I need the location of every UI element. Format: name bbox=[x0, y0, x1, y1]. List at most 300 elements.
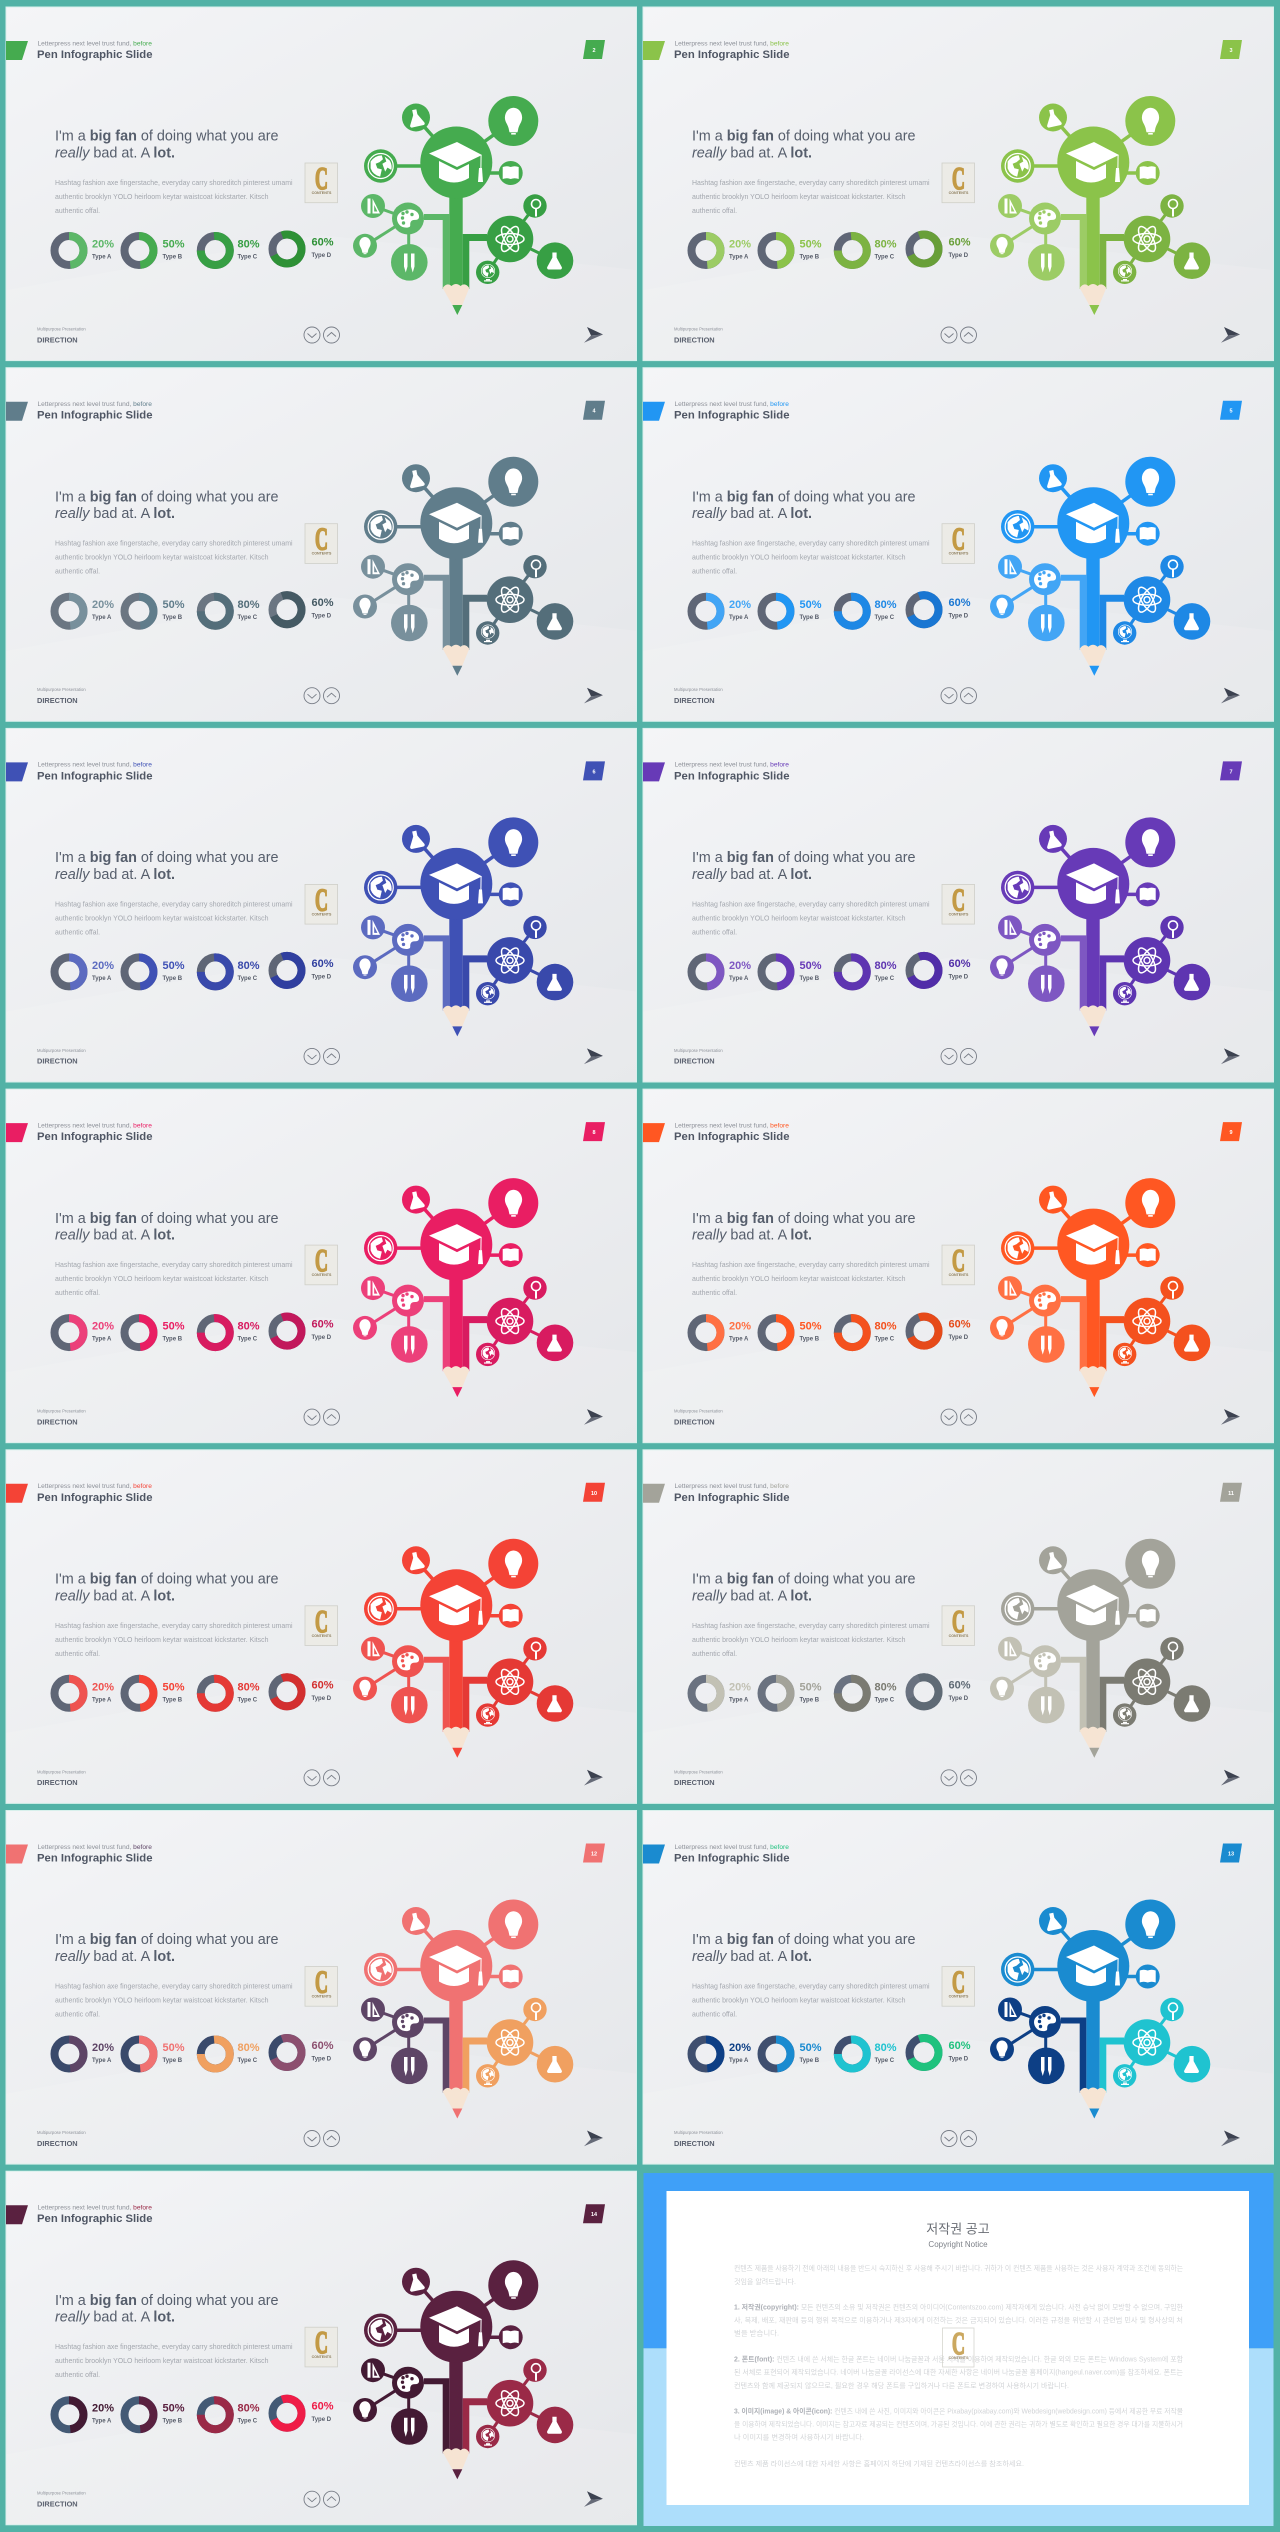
donut A bbox=[692, 2040, 751, 2068]
pen tree diagram bbox=[353, 1178, 573, 1397]
logo: CONTENTS bbox=[949, 1273, 969, 1277]
donut C bbox=[201, 1318, 260, 1347]
slide 7 purple bbox=[643, 728, 1274, 1082]
pencil body bbox=[424, 1633, 487, 1758]
body text: Hashtag fashion axe fingerstache, everyday carry shoreditch pinterest umami bbox=[55, 180, 293, 187]
body text: authentic brooklyn YOLO heirloom keytar waistcoat kickstarter. Kitsch bbox=[55, 555, 269, 562]
donut D bbox=[272, 1677, 334, 1706]
logo: CONTENTS bbox=[312, 1994, 332, 1998]
logo bbox=[942, 521, 974, 563]
top icon cluster bbox=[1001, 96, 1175, 198]
panel: copyright notice bbox=[644, 2173, 1274, 2526]
pen tree diagram bbox=[353, 1900, 573, 2118]
logo: CONTENTS bbox=[949, 552, 969, 556]
page number bbox=[583, 40, 605, 59]
body text bbox=[55, 1262, 293, 1297]
donut C bbox=[201, 2040, 260, 2069]
donut B: 50% bbox=[800, 960, 822, 972]
logo: CONTENTS bbox=[949, 912, 969, 916]
title: Pen Infographic Slide bbox=[37, 1131, 152, 1143]
footer label: DIRECTION bbox=[674, 1057, 715, 1066]
pen tree diagram bbox=[353, 2260, 573, 2479]
headline: really bad at. A lot. bbox=[55, 867, 175, 883]
page number bbox=[583, 761, 605, 780]
headline: really bad at. A lot. bbox=[692, 867, 812, 883]
top icon cluster bbox=[1001, 1900, 1175, 2002]
right icon cluster bbox=[1113, 194, 1210, 284]
body text bbox=[55, 541, 293, 576]
right icon cluster bbox=[1113, 1637, 1210, 1727]
logo: C bbox=[952, 161, 965, 196]
donut A bbox=[692, 1318, 751, 1347]
footer label bbox=[674, 687, 723, 705]
send icon bbox=[584, 1048, 603, 1064]
right icon cluster bbox=[1113, 555, 1210, 645]
body text: authentic brooklyn YOLO heirloom keytar waistcoat kickstarter. Kitsch bbox=[692, 1276, 906, 1283]
body text: authentic brooklyn YOLO heirloom keytar waistcoat kickstarter. Kitsch bbox=[692, 555, 906, 562]
logo: C bbox=[952, 521, 965, 557]
title: Pen Infographic Slide bbox=[674, 1852, 790, 1864]
donut D: 60% bbox=[948, 597, 971, 609]
donut A: 20% bbox=[92, 1681, 114, 1693]
donut C: 80% bbox=[874, 1681, 897, 1693]
slide background with tab bbox=[6, 368, 636, 721]
footer label: Multipurpose Presentation bbox=[37, 2491, 86, 2496]
pen tree diagram bbox=[990, 457, 1210, 676]
donut A: 20% bbox=[729, 2042, 751, 2054]
body text: authentic offal. bbox=[692, 1290, 737, 1297]
body text: authentic offal. bbox=[55, 208, 100, 215]
right icon cluster bbox=[476, 2358, 573, 2448]
donut C: Type C bbox=[238, 254, 258, 260]
donut A: Type A bbox=[92, 1697, 112, 1703]
donut C: Type C bbox=[874, 1337, 895, 1343]
nav arrows bbox=[304, 1048, 340, 1064]
title: Pen Infographic Slide bbox=[674, 1131, 790, 1143]
headline bbox=[692, 129, 916, 162]
donut A: Type A bbox=[729, 1337, 749, 1343]
page number: 4 bbox=[592, 409, 596, 415]
donut B: Type B bbox=[800, 254, 820, 260]
donut D bbox=[910, 595, 971, 624]
donut B bbox=[762, 1318, 822, 1347]
notice body: 컨텐츠 제품을 사용하기 전에 아래의 내용을 반드시 숙지하신 후 사용해 주시기 바랍니다. 귀하가 이 컨텐츠 제품을 사용하는 것은 사용자 계약과 조건에 동의하는 bbox=[734, 2264, 1184, 2272]
send icon bbox=[584, 688, 603, 703]
donut C: 80% bbox=[238, 1681, 260, 1693]
nav arrows bbox=[304, 1409, 340, 1425]
donut D bbox=[272, 2399, 334, 2428]
logo bbox=[305, 161, 338, 203]
page number bbox=[1220, 761, 1242, 780]
donut C bbox=[838, 1679, 897, 1708]
donut C: 80% bbox=[238, 238, 260, 250]
donut B: 50% bbox=[800, 238, 822, 250]
footer label bbox=[37, 1048, 86, 1066]
headline bbox=[692, 1572, 916, 1604]
logo: C bbox=[952, 1603, 965, 1639]
donut C: 80% bbox=[874, 2042, 897, 2054]
slide background with tab bbox=[6, 1450, 636, 1803]
donut D: 60% bbox=[312, 958, 334, 970]
left icon cluster bbox=[990, 915, 1065, 1002]
notice body: 을 이용하여 제작되었습니다. 이미지는 참고자료 제공되는 컨텐츠이며, 가공된 것입니다. 이에 관한 권리는 귀하가 별도로 확인하고 필요한 경우 대가를 지불하시거 bbox=[734, 2420, 1183, 2428]
footer label: DIRECTION bbox=[37, 1057, 78, 1066]
slide background with tab bbox=[643, 1810, 1274, 2164]
donut A: Type A bbox=[729, 615, 749, 621]
slide background with tab bbox=[6, 1089, 636, 1443]
notice body: 나 이미지를 변경하여 사용하시기 바랍니다. bbox=[734, 2432, 864, 2442]
nav arrows bbox=[941, 688, 976, 704]
donut A: 20% bbox=[729, 1321, 751, 1333]
donut B: Type B bbox=[162, 1697, 183, 1703]
donut A bbox=[54, 236, 114, 265]
body text bbox=[55, 1984, 293, 2018]
pen tree diagram bbox=[990, 1178, 1210, 1397]
right icon cluster bbox=[476, 555, 573, 645]
body text: Hashtag fashion axe fingerstache, everyday carry shoreditch pinterest umami bbox=[692, 541, 930, 548]
logo: C bbox=[952, 1243, 965, 1278]
donut A: 20% bbox=[729, 238, 751, 250]
donut C: Type C bbox=[874, 615, 895, 621]
page number bbox=[1220, 40, 1242, 59]
top icon cluster bbox=[364, 96, 538, 198]
pencil body bbox=[424, 551, 487, 676]
headline: really bad at. A lot. bbox=[55, 2310, 175, 2326]
top icon cluster bbox=[1001, 1539, 1175, 1641]
body text: authentic offal. bbox=[692, 929, 737, 936]
pencil body bbox=[1061, 1633, 1124, 1758]
body text: authentic brooklyn YOLO heirloom keytar waistcoat kickstarter. Kitsch bbox=[692, 1637, 906, 1644]
nav arrows bbox=[304, 1770, 340, 1786]
donut A bbox=[692, 236, 751, 265]
top icon cluster bbox=[1001, 817, 1175, 920]
pen tree diagram bbox=[353, 1539, 573, 1758]
nav arrows bbox=[304, 2130, 340, 2146]
donut A: 20% bbox=[92, 960, 114, 972]
send icon bbox=[584, 1409, 603, 1425]
footer label: DIRECTION bbox=[37, 335, 78, 344]
donut B: Type B bbox=[162, 2058, 183, 2064]
pencil body bbox=[424, 1994, 487, 2118]
headline: I'm a big fan of doing what you are bbox=[55, 2293, 279, 2309]
right icon cluster bbox=[476, 1998, 573, 2088]
donut C: Type C bbox=[238, 2058, 258, 2064]
kicker: Letterpress next level trust fund, before bbox=[674, 1844, 789, 1851]
donut B: 50% bbox=[162, 238, 185, 250]
kicker: Letterpress next level trust fund, before bbox=[38, 401, 152, 408]
donut A: 20% bbox=[92, 2042, 114, 2054]
headline: I'm a big fan of doing what you are bbox=[55, 129, 279, 145]
donut D bbox=[910, 956, 971, 985]
left icon cluster bbox=[353, 1637, 428, 1723]
headline: really bad at. A lot. bbox=[692, 1228, 812, 1244]
pencil body bbox=[424, 190, 487, 315]
donut D: Type D bbox=[312, 1696, 332, 1702]
headline bbox=[55, 489, 279, 522]
logo bbox=[305, 1243, 338, 1285]
donut D: 60% bbox=[312, 597, 334, 609]
body text bbox=[55, 1623, 293, 1658]
kicker: Letterpress next level trust fund, before bbox=[38, 1844, 152, 1851]
footer label: Multipurpose Presentation bbox=[674, 1769, 723, 1774]
left icon cluster bbox=[353, 1998, 428, 2084]
footer label: DIRECTION bbox=[674, 696, 715, 705]
logo bbox=[305, 2325, 338, 2367]
notice body: 컨텐츠와 함께 제공되지 않으므로, 필요한 경우 해당 폰트를 구입하거나 다른 폰트로 변경하여 사용하시기 바랍니다. bbox=[734, 2381, 1069, 2390]
logo bbox=[305, 1964, 338, 2006]
donut C: Type C bbox=[238, 1337, 258, 1343]
body text: authentic offal. bbox=[55, 569, 100, 576]
footer label: Multipurpose Presentation bbox=[37, 1048, 86, 1053]
slide 3 light green bbox=[643, 7, 1274, 361]
headline: I'm a big fan of doing what you are bbox=[692, 1572, 916, 1588]
donut C bbox=[201, 957, 260, 986]
slide 11 warm grey bbox=[643, 1450, 1274, 1803]
donut C: 80% bbox=[874, 960, 897, 972]
headline bbox=[55, 850, 279, 883]
pen tree diagram bbox=[353, 96, 573, 315]
logo: C bbox=[952, 1964, 965, 2000]
title: Pen Infographic Slide bbox=[674, 49, 790, 61]
donut B: 50% bbox=[800, 2042, 822, 2054]
left icon cluster bbox=[990, 1637, 1065, 1723]
logo: C bbox=[952, 882, 965, 918]
page number: 8 bbox=[592, 1130, 596, 1136]
page number: 6 bbox=[592, 769, 596, 775]
footer label: DIRECTION bbox=[37, 696, 78, 705]
donut D: Type D bbox=[948, 1696, 969, 1702]
pencil body bbox=[424, 1272, 487, 1397]
donut B: Type B bbox=[800, 976, 820, 982]
top icon cluster bbox=[1001, 1178, 1175, 1281]
body text: authentic offal. bbox=[55, 2372, 100, 2379]
donut D: 60% bbox=[948, 958, 971, 970]
pen tree diagram bbox=[353, 457, 573, 676]
donut D: 60% bbox=[948, 1679, 971, 1691]
pen tree diagram bbox=[353, 817, 573, 1036]
notice title: 저작권 공고 bbox=[926, 2222, 990, 2236]
slide 10 red bbox=[6, 1450, 636, 1803]
donut D: 60% bbox=[312, 1679, 334, 1691]
footer label bbox=[674, 326, 723, 344]
body text: authentic brooklyn YOLO heirloom keytar waistcoat kickstarter. Kitsch bbox=[55, 2358, 269, 2365]
left icon cluster bbox=[353, 2358, 428, 2445]
nav arrows bbox=[941, 1409, 976, 1425]
body text: authentic offal. bbox=[55, 1290, 100, 1297]
footer label bbox=[37, 1769, 86, 1787]
donut A bbox=[54, 1679, 114, 1708]
kicker: Letterpress next level trust fund, before bbox=[38, 2204, 152, 2211]
headline: really bad at. A lot. bbox=[55, 506, 175, 522]
title: Pen Infographic Slide bbox=[37, 49, 152, 61]
page number: 11 bbox=[1228, 1491, 1234, 1497]
donut C: 80% bbox=[874, 238, 897, 250]
slide background with tab bbox=[643, 1450, 1274, 1803]
kicker: Letterpress next level trust fund, before bbox=[38, 40, 152, 47]
logo: C bbox=[315, 521, 328, 557]
donut A: Type A bbox=[92, 615, 112, 621]
donut C: Type C bbox=[874, 1697, 895, 1703]
headline: really bad at. A lot. bbox=[55, 1588, 175, 1604]
kicker: Letterpress next level trust fund, before bbox=[674, 40, 789, 47]
donut C: 80% bbox=[874, 599, 897, 611]
right icon cluster bbox=[1113, 1276, 1210, 1366]
footer label bbox=[37, 1409, 86, 1426]
logo bbox=[942, 1964, 974, 2006]
donut B: 50% bbox=[162, 599, 185, 611]
notice body: 벌을 받습니다. bbox=[734, 2328, 779, 2338]
page number: 7 bbox=[1229, 769, 1233, 775]
donut B: 50% bbox=[162, 2042, 185, 2054]
page number: 3 bbox=[1229, 48, 1233, 54]
donut B bbox=[124, 2400, 185, 2429]
kicker: Letterpress next level trust fund, before bbox=[674, 1122, 789, 1129]
donut B: Type B bbox=[162, 254, 183, 260]
donut A bbox=[54, 597, 114, 626]
footer label: DIRECTION bbox=[674, 1778, 715, 1787]
notice body: 사, 복제, 배포, 재판매 등의 행위 목적으로 이용하거나 제3자에게 이전하는 것은 금지되어 있습니다. 이러한 규정을 위반할 시 관련법 민사 및 형사상의 처 bbox=[734, 2316, 1183, 2324]
kicker: Letterpress next level trust fund, before bbox=[38, 1122, 152, 1129]
donut C: Type C bbox=[238, 1697, 258, 1703]
donut C bbox=[838, 236, 897, 265]
headline: I'm a big fan of doing what you are bbox=[55, 1572, 279, 1588]
body text bbox=[692, 180, 930, 215]
donut B: 50% bbox=[162, 960, 185, 972]
kicker: Letterpress next level trust fund, before bbox=[38, 762, 152, 769]
body text: Hashtag fashion axe fingerstache, everyday carry shoreditch pinterest umami bbox=[692, 901, 930, 908]
send icon bbox=[584, 1770, 603, 1786]
notice body: 3. 이미지(image) & 아이콘(icon): 컨텐츠 내에 쓴 사진, 이미지와 아이콘은 Pixabay(pixabay.com)와 Webdesign(webdesign.com) 등에서 제공한 무료 저작물 bbox=[734, 2406, 1184, 2416]
donut D bbox=[272, 234, 334, 264]
footer label: DIRECTION bbox=[37, 1778, 78, 1787]
nav arrows bbox=[941, 327, 976, 343]
donut A bbox=[692, 1679, 751, 1708]
notice body: 1. 저작권(copyright): 모든 컨텐츠의 소유 및 저작권은 컨텐츠의 아이디어(Contentszoo.com) 제작자에게 있습니다. 사전 승낙 없이 모방할 수 없으며, 구입한 bbox=[734, 2302, 1184, 2312]
donut B bbox=[124, 236, 185, 265]
left icon cluster bbox=[353, 915, 428, 1002]
notice subtitle: Copyright Notice bbox=[928, 2240, 988, 2249]
donut A bbox=[692, 597, 751, 626]
donut A: Type A bbox=[92, 1337, 112, 1343]
donut C: 80% bbox=[238, 1321, 260, 1333]
donut A bbox=[54, 1318, 114, 1347]
logo: C bbox=[315, 1964, 328, 2000]
body text: authentic brooklyn YOLO heirloom keytar waistcoat kickstarter. Kitsch bbox=[55, 1637, 269, 1644]
top icon cluster bbox=[364, 2260, 538, 2363]
logo: CONTENTS bbox=[312, 2355, 332, 2359]
donut A: Type A bbox=[729, 976, 749, 982]
donut D: Type D bbox=[948, 974, 969, 980]
body text: Hashtag fashion axe fingerstache, everyday carry shoreditch pinterest umami bbox=[692, 1262, 930, 1269]
donut C bbox=[201, 2400, 260, 2429]
blue backdrop bbox=[644, 2173, 1274, 2526]
donut D bbox=[272, 2038, 334, 2067]
slide 9 orange bbox=[643, 1089, 1274, 1443]
page number bbox=[583, 1122, 605, 1141]
page number: 14 bbox=[591, 2212, 598, 2218]
donut A: 20% bbox=[92, 2403, 114, 2415]
donut B bbox=[762, 1679, 822, 1708]
slide 12 coral bbox=[6, 1810, 636, 2164]
donut C: Type C bbox=[874, 2058, 895, 2064]
donut C bbox=[201, 1679, 260, 1708]
page number bbox=[1220, 1483, 1242, 1502]
donut D: 60% bbox=[312, 2401, 334, 2413]
logo: CONTENTS bbox=[312, 191, 332, 195]
page number bbox=[583, 401, 605, 420]
send icon bbox=[1221, 688, 1240, 703]
slide background with tab bbox=[643, 7, 1274, 361]
logo: CONTENTS bbox=[312, 1634, 332, 1638]
headline: I'm a big fan of doing what you are bbox=[692, 1211, 916, 1227]
footer label: DIRECTION bbox=[674, 2139, 715, 2148]
headline: really bad at. A lot. bbox=[55, 1949, 175, 1965]
logo: CONTENTS bbox=[949, 1634, 969, 1638]
donut B: Type B bbox=[800, 1697, 820, 1703]
donut A: 20% bbox=[92, 599, 114, 611]
donut C: 80% bbox=[238, 2042, 260, 2054]
donut C: 80% bbox=[874, 1321, 897, 1333]
body text: Hashtag fashion axe fingerstache, everyday carry shoreditch pinterest umami bbox=[692, 180, 930, 187]
center logo: CONTENTS bbox=[949, 2356, 969, 2360]
title: Pen Infographic Slide bbox=[37, 770, 152, 782]
donut D: 60% bbox=[948, 236, 971, 248]
body text: authentic brooklyn YOLO heirloom keytar waistcoat kickstarter. Kitsch bbox=[55, 1998, 269, 2004]
donut B bbox=[762, 2040, 822, 2068]
body text: Hashtag fashion axe fingerstache, everyday carry shoreditch pinterest umami bbox=[692, 1984, 930, 1990]
donut C: Type C bbox=[238, 2419, 258, 2425]
logo bbox=[305, 521, 338, 563]
body text: Hashtag fashion axe fingerstache, everyday carry shoreditch pinterest umami bbox=[55, 901, 293, 908]
footer label bbox=[37, 2130, 86, 2148]
donut C: 80% bbox=[238, 599, 260, 611]
send icon bbox=[1221, 327, 1240, 343]
donut A: 20% bbox=[92, 238, 114, 250]
body text: authentic brooklyn YOLO heirloom keytar waistcoat kickstarter. Kitsch bbox=[55, 194, 269, 201]
headline: I'm a big fan of doing what you are bbox=[692, 1932, 916, 1948]
kicker: Letterpress next level trust fund, before bbox=[674, 401, 789, 408]
donut A bbox=[54, 2040, 114, 2068]
logo bbox=[942, 1243, 974, 1285]
donut B bbox=[762, 236, 822, 265]
slide 8 pink bbox=[6, 1089, 636, 1443]
pen tree diagram bbox=[990, 1900, 1210, 2118]
body text: Hashtag fashion axe fingerstache, everyday carry shoreditch pinterest umami bbox=[55, 541, 293, 548]
donut D bbox=[910, 2038, 971, 2067]
body text: authentic offal. bbox=[692, 569, 737, 576]
page number bbox=[1220, 1844, 1242, 1862]
page number: 2 bbox=[592, 48, 596, 54]
slide background with tab bbox=[6, 1810, 636, 2164]
donut D bbox=[910, 1677, 971, 1706]
logo: CONTENTS bbox=[312, 912, 332, 916]
slide background with tab bbox=[6, 7, 636, 361]
page number bbox=[583, 1483, 605, 1502]
body text: authentic offal. bbox=[692, 2012, 737, 2018]
donut D bbox=[272, 956, 334, 985]
footer label: Multipurpose Presentation bbox=[674, 1409, 723, 1414]
donut A: Type A bbox=[729, 2058, 749, 2064]
donut A: Type A bbox=[92, 2419, 112, 2425]
page number: 5 bbox=[1229, 409, 1233, 415]
body text bbox=[692, 1623, 930, 1658]
pencil body bbox=[1061, 551, 1124, 676]
logo: CONTENTS bbox=[312, 552, 332, 556]
donut C bbox=[201, 597, 260, 626]
footer label: Multipurpose Presentation bbox=[674, 2130, 723, 2135]
donut C bbox=[201, 236, 260, 265]
body text: authentic offal. bbox=[692, 208, 737, 215]
